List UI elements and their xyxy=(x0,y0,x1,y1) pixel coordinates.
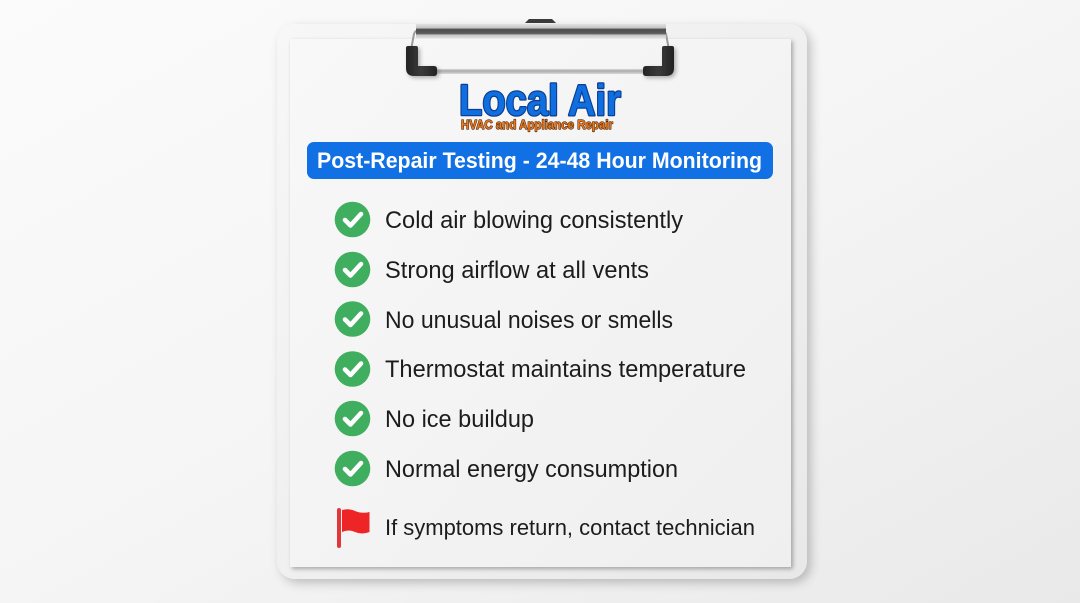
icon: check xyxy=(335,252,370,287)
checklist item 2 xyxy=(335,252,649,287)
warning note xyxy=(337,508,755,548)
heading banner: Post-Repair Testing - 24-48 Hour Monitoring xyxy=(317,148,762,173)
clip: right rubber grip xyxy=(643,46,674,76)
icon: check xyxy=(335,301,370,337)
logo xyxy=(459,76,621,132)
clip: lower wire xyxy=(432,70,648,72)
logo: tagline: HVAC and Appliance Repair xyxy=(461,117,613,132)
checklist item 1: Cold air blowing consistently xyxy=(385,207,683,234)
icon: check xyxy=(335,401,370,436)
clipboard board xyxy=(277,24,807,579)
clip: metal bar xyxy=(416,24,666,38)
checklist item 3 xyxy=(335,301,673,337)
icon: check xyxy=(335,351,370,387)
icon: check xyxy=(335,451,370,486)
icon: check xyxy=(335,202,370,237)
checklist item 4 xyxy=(335,351,746,387)
checklist item 4: Thermostat maintains temperature xyxy=(385,356,746,383)
logo: Local Air wordmark: Local Air xyxy=(459,76,621,125)
clip: left rubber grip xyxy=(406,46,437,76)
clip: wire loop xyxy=(411,30,669,50)
icon: red flag xyxy=(337,508,370,548)
checklist item 1 xyxy=(335,202,683,237)
checklist item 6 xyxy=(335,451,678,486)
warning note: If symptoms return, contact technician xyxy=(385,515,755,540)
checklist item 6: Normal energy consumption xyxy=(385,456,678,483)
checklist item 2: Strong airflow at all vents xyxy=(385,257,649,284)
clip xyxy=(406,19,674,76)
paper sheet xyxy=(290,39,791,567)
heading banner xyxy=(307,142,773,179)
checklist item 5: No ice buildup xyxy=(385,406,534,433)
checklist item 5 xyxy=(335,401,534,436)
checklist item 3: No unusual noises or smells xyxy=(385,307,673,334)
clip: top knob xyxy=(525,19,556,23)
